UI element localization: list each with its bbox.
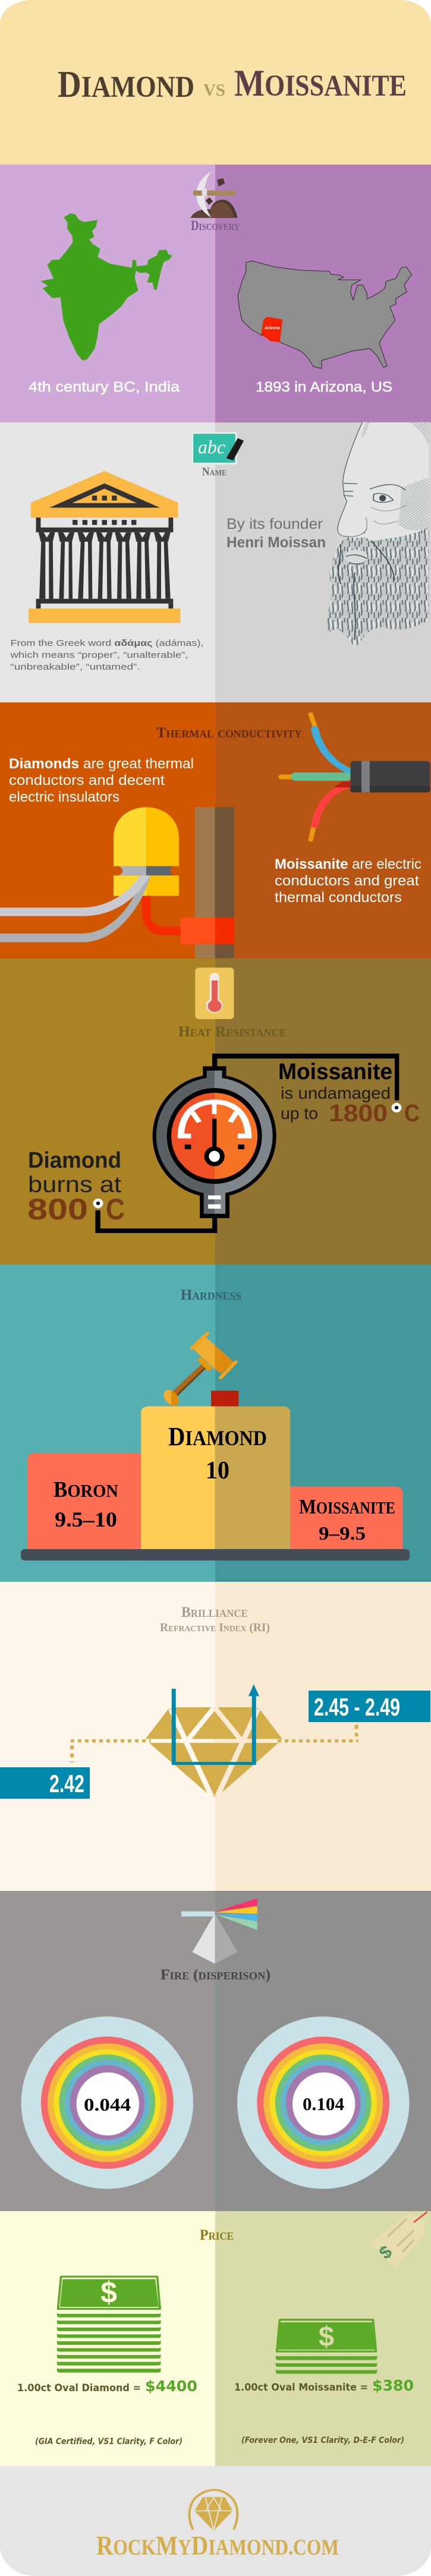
label: diamond hardness: DIAMOND [168, 1422, 267, 1451]
panel: header [0, 0, 431, 165]
panel: footer [0, 2466, 431, 2576]
text: moissanite discovery: 1893 in Arizona, US [256, 379, 392, 395]
text: greek origin [10, 638, 204, 672]
heading: hardness: Hardness [181, 1287, 241, 1303]
title: vs [203, 74, 225, 102]
text: moissanite heat: up to [281, 1104, 318, 1123]
map: India [40, 213, 172, 361]
icon: price tag [370, 2212, 427, 2268]
icon: greek temple [29, 471, 180, 623]
icon: tall money stack [57, 2276, 161, 2373]
text: diamond conductivity [9, 756, 194, 805]
map: USA with Arizona highlighted: Arizona [265, 326, 280, 330]
title: MOISSANITE [234, 62, 407, 104]
label: moissanite hardness [299, 1495, 395, 1544]
icon: diamond with refracted light ray [145, 1684, 282, 1796]
heading: heat resistance: Heat Resistance [178, 1024, 287, 1040]
text: founder: By its founder [226, 516, 323, 532]
icon: tall money stack: $ [100, 2276, 117, 2309]
map: USA with Arizona highlighted [238, 261, 412, 368]
text: diamond heat: 800 [27, 1193, 88, 1226]
icon: abc board [191, 432, 244, 465]
panel: hardness [0, 1265, 431, 1582]
text: moissanite conductivity: thermal conductors [275, 890, 402, 906]
text: diamond price [17, 2378, 197, 2395]
text: diamond heat: burns at [28, 1172, 121, 1197]
chart: moissanite dispersion rings [237, 2017, 409, 2189]
chart: diamond dispersion rings: 0.044 [84, 2094, 131, 2115]
heading: fire: Fire (disperison) [161, 1967, 270, 1983]
icon: short money stack [276, 2320, 377, 2374]
text: founder: Henri Moissan [226, 534, 326, 551]
chart: pressure gauge [95, 1054, 399, 1233]
label: boron hardness: BORON [54, 1477, 118, 1502]
icon: cable with coloured wires [278, 714, 430, 840]
callout: diamond refractive index [0, 1767, 90, 1799]
note: diamond specification: (GIA Certified, VS1 Clarity, F Color) [35, 2437, 183, 2446]
text: diamond conductivity: conductors and decent [9, 773, 165, 789]
chart: hardness podium [21, 1407, 410, 1560]
heading: thermal conductivity: Thermal conductivity [156, 725, 302, 741]
text: moissanite conductivity: conductors and great [275, 873, 419, 889]
icon: lamp and post [0, 807, 234, 958]
panel: discovery [0, 165, 431, 422]
text: diamond discovery: 4th century BC, India [29, 379, 180, 395]
portrait: Henri Moissan [326, 422, 429, 647]
panel: price [0, 2211, 431, 2466]
chart: moissanite dispersion rings: 0.104 [303, 2093, 344, 2114]
heading: brilliance: Brilliance [181, 1604, 248, 1620]
text: diamond conductivity: electric insulators [9, 789, 119, 805]
panel: thermal conductivity [0, 702, 431, 958]
icon: abc board: abc [198, 436, 225, 458]
text: diamond heat: C [106, 1193, 125, 1226]
heading: name: Name [202, 465, 226, 478]
heading: discovery: Discovery [191, 218, 240, 233]
heading: price: Price [200, 2227, 234, 2243]
icon: price tag: $ [376, 2242, 396, 2263]
title: DIAMOND [58, 64, 194, 105]
connector: dotted lines [71, 1725, 358, 1762]
panel: brilliance [0, 1582, 431, 1891]
text: diamond price: $4400 [145, 2378, 197, 2395]
text: moissanite price [234, 2377, 414, 2394]
panel: name [0, 422, 431, 702]
text: moissanite price: 1.00ct Oval Moissanite = [234, 2382, 368, 2394]
panel: heat resistance [0, 958, 431, 1265]
text: greek origin: which means “proper”, “unalterable”, [10, 650, 188, 660]
text: moissanite conductivity [275, 856, 421, 906]
icon: thermometer [195, 967, 234, 1019]
label: moissanite hardness: MOISSANITE [299, 1495, 395, 1518]
text: diamond heat: Diamond [28, 1148, 121, 1173]
title [58, 62, 407, 105]
text: greek origin: “unbreakable”, “untamed”. [11, 662, 140, 672]
callout: diamond refractive index: 2.42 [49, 1770, 84, 1798]
note: moissanite specification: (Forever One, VS1 Clarity, D-E-F Color) [241, 2436, 404, 2445]
text: moissanite price: $380 [372, 2377, 414, 2394]
text: moissanite conductivity: Moissanite are electric [275, 856, 421, 872]
text: diamond conductivity: Diamonds are great thermal [9, 756, 194, 772]
icon: prism [181, 1898, 257, 1964]
icon: pickaxe and rocks [190, 171, 237, 218]
icon: short money stack: $ [319, 2320, 334, 2352]
label: diamond hardness: 10 [206, 1457, 229, 1484]
icon: gavel [161, 1333, 238, 1407]
logo: RockMyDiamond.com wordmark: ROCKMYDIAMOND.COM [96, 2530, 339, 2561]
text: diamond heat [27, 1148, 125, 1226]
text: greek origin: From the Greek word αδάμας (adámas), [11, 638, 203, 648]
panel: fire [0, 1891, 431, 2211]
chart: diamond dispersion rings [21, 2017, 193, 2189]
text: diamond price: 1.00ct Oval Diamond = [17, 2382, 141, 2394]
label: boron hardness: 9.5–10 [55, 1508, 117, 1531]
text: moissanite heat: Moissanite [278, 1060, 392, 1084]
label: moissanite hardness: 9–9.5 [319, 1522, 366, 1544]
label: diamond hardness [168, 1422, 267, 1484]
label: boron hardness [54, 1477, 118, 1531]
logo: diamond in arc [190, 2490, 237, 2531]
text: moissanite heat: 1800 [329, 1099, 388, 1127]
text: founder [226, 516, 326, 551]
text: moissanite heat: is undamaged [281, 1084, 391, 1102]
text: moissanite heat: C [404, 1099, 420, 1127]
callout: moissanite refractive index: 2.45 - 2.49 [314, 1693, 400, 1721]
heading: refractive index: Refractive Index (RI) [160, 1621, 270, 1634]
text: moissanite heat [278, 1060, 420, 1127]
